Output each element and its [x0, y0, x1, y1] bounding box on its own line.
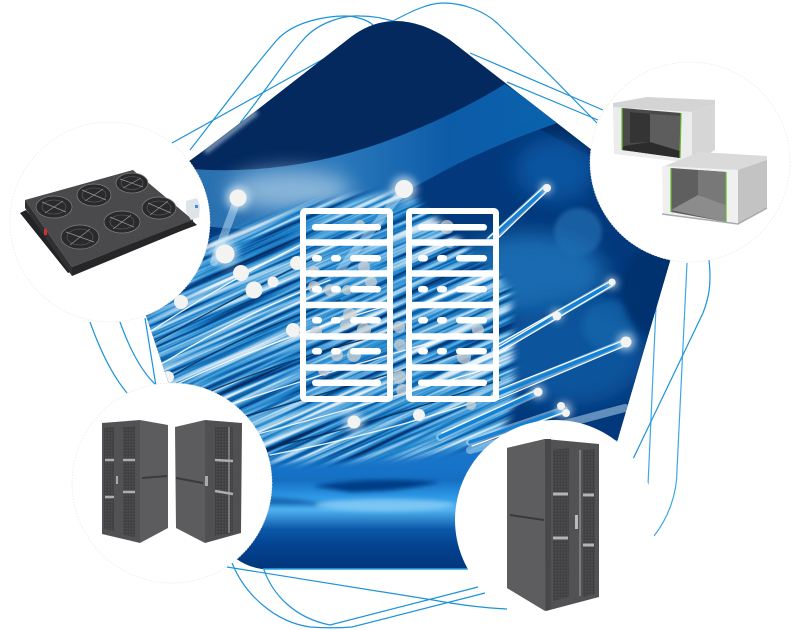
right rack outline	[409, 211, 496, 399]
bokeh behind central icon	[308, 220, 484, 410]
glowing fibre ends	[162, 112, 635, 432]
bottom bands	[236, 440, 618, 569]
icon: tall server rack	[507, 439, 599, 611]
icon: rack panel side view	[175, 420, 242, 543]
icon: lower wall cabinet	[662, 152, 767, 224]
right side bokeh	[455, 138, 682, 405]
hand drawn strands	[145, 245, 500, 455]
left rack outline	[303, 211, 390, 399]
icon: upper wall cabinet	[613, 97, 715, 163]
fibre optic image pentagon	[146, 21, 670, 569]
circle: dual server racks	[72, 383, 272, 583]
swoosh band	[180, 84, 560, 229]
circle: single server rack	[455, 420, 655, 620]
dense fibre streaks	[146, 188, 520, 468]
icon: roof fan tray	[20, 170, 200, 276]
circle: fan unit	[10, 122, 210, 322]
right fibre bundles	[214, 186, 627, 450]
icon: rack door side view	[102, 420, 168, 543]
dark region below the swoosh band	[146, 129, 670, 442]
circle: wall cabinets	[590, 62, 790, 262]
icon: central server racks	[303, 211, 496, 399]
decorative thin curves	[90, 3, 710, 628]
band glow	[228, 170, 352, 210]
pentagon bottom edge	[263, 568, 468, 570]
